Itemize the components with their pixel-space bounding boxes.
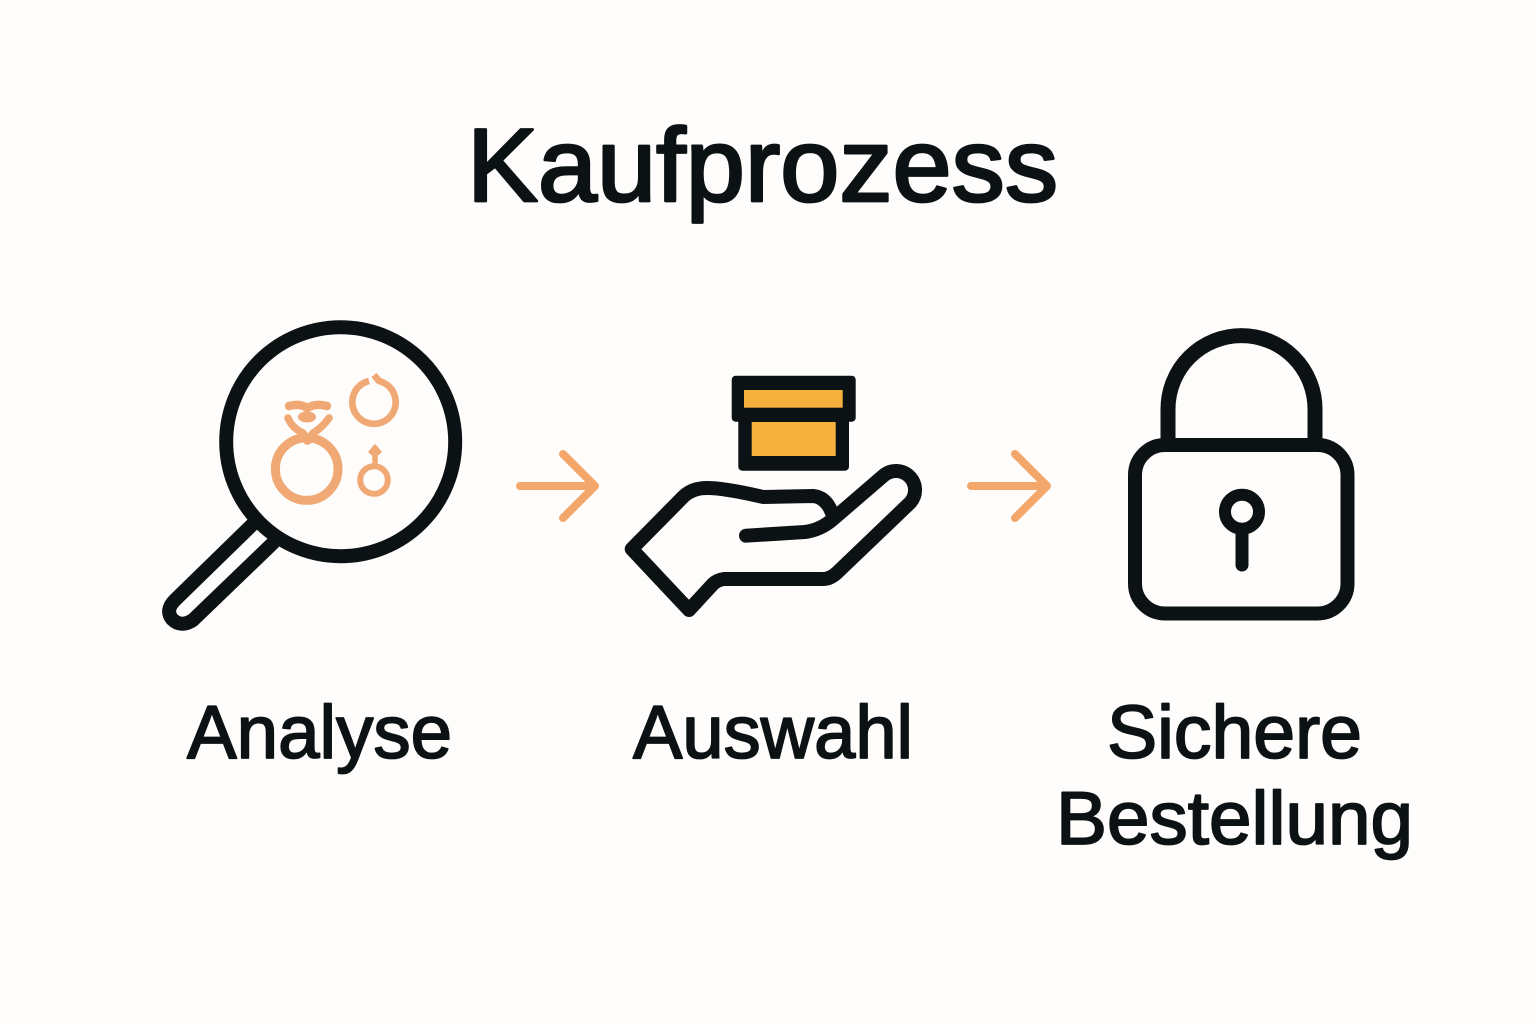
title: Kaufprozess [467, 108, 1058, 224]
label: Sichere Bestellung: Sichere [1107, 690, 1362, 774]
arrow: selection to secure order [971, 454, 1047, 518]
lock body [1135, 445, 1348, 614]
lower right ring [360, 446, 388, 494]
upper right ring [352, 375, 396, 424]
icon: magnifying glass with rings [169, 327, 455, 624]
icon: padlock [1135, 336, 1348, 614]
label: Auswahl: Auswahl [633, 690, 913, 774]
large ring [275, 405, 338, 500]
icon: hand holding box [632, 376, 915, 610]
label: Sichere Bestellung [1056, 690, 1413, 860]
box [732, 376, 856, 471]
hand [632, 471, 915, 610]
keyhole [1225, 495, 1259, 565]
arrow: analyse to selection [520, 454, 595, 518]
label: Sichere Bestellung: Bestellung [1056, 776, 1413, 860]
magnifier lens [226, 327, 455, 556]
lock shackle [1168, 336, 1315, 445]
label: Analyse: Analyse [187, 690, 452, 774]
magnifier handle [169, 523, 273, 624]
